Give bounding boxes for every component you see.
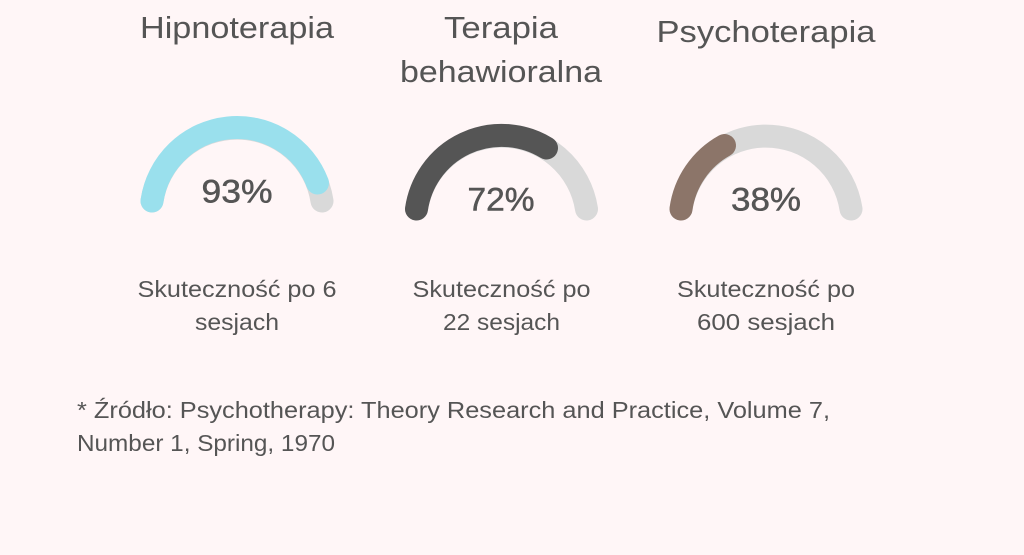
caption: efficacy after 22 sessions: Skuteczność po (412, 276, 590, 302)
source note: Number 1, Spring, 1970 (77, 430, 335, 456)
caption: efficacy after 6 sessions: sesjach (195, 309, 279, 335)
gauge: 93% (152, 127, 322, 201)
caption: efficacy after 6 sessions: Skuteczność po 6 (138, 276, 336, 302)
caption: efficacy after 22 sessions: 22 sesjach (443, 309, 560, 335)
gauge: 38% (681, 136, 851, 209)
heading: Terapia behawioralna: Terapia (444, 10, 559, 45)
heading: Psychoterapia: Psychoterapia (656, 14, 876, 49)
heading: Terapia behawioralna: behawioralna (400, 54, 603, 89)
value: 72%: 72% (468, 182, 534, 218)
panel: Psychoterapia (656, 14, 876, 335)
caption: efficacy after 600 sessions: 600 sesjach (697, 309, 835, 335)
source note: * Źródło: Psychotherapy: Theory Research and Practice, Volume 7, (77, 397, 830, 423)
gauge: 72% (416, 135, 586, 209)
panel: Hipnoterapia (138, 10, 336, 335)
caption: efficacy after 600 sessions: Skuteczność po (677, 276, 855, 302)
heading: Hipnoterapia: Hipnoterapia (140, 10, 335, 45)
value: 93%: 93% (202, 174, 272, 210)
value: 38%: 38% (731, 182, 801, 218)
panel: Terapia behawioralna (400, 10, 603, 335)
